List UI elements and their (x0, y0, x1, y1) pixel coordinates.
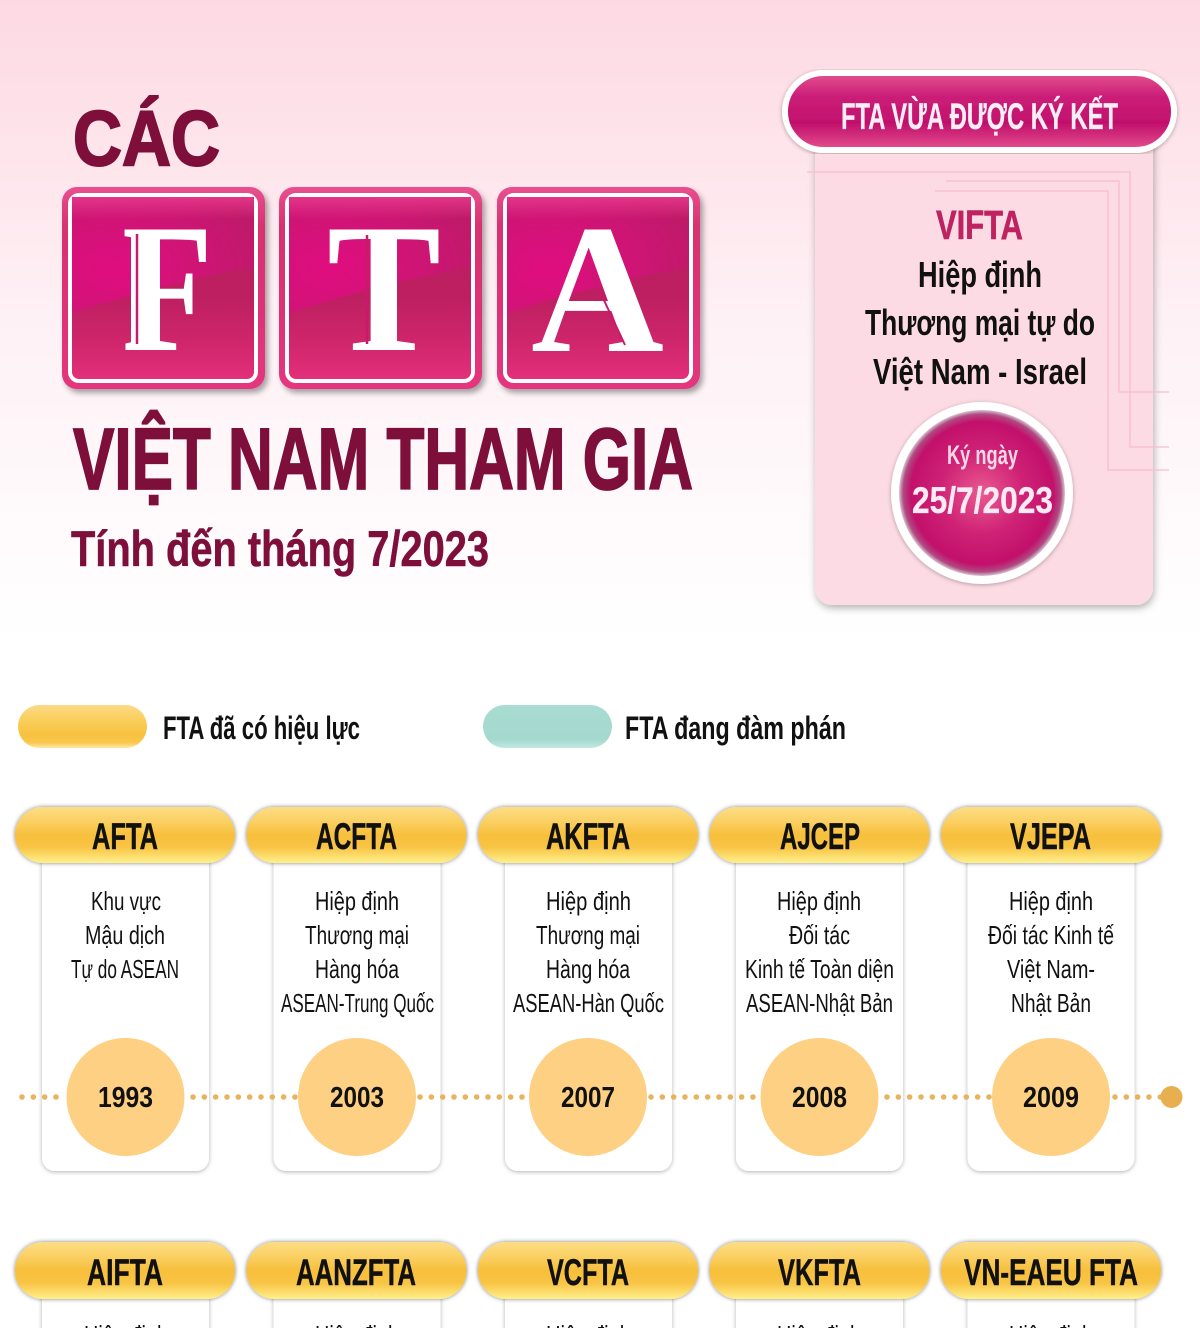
signing date badge: 25/7/2023 (912, 480, 1053, 521)
legend: negotiating (483, 705, 846, 748)
text: VIFTA description: Hiệp định (918, 254, 1042, 295)
text: VIFTA description (865, 202, 1095, 392)
tile: letter F (62, 186, 265, 390)
year: 2007 (529, 1038, 647, 1156)
tile: letter T: T (327, 186, 441, 390)
card: AJCEP: ASEAN-Nhật Bản (746, 988, 893, 1018)
year: 2009 (992, 1038, 1110, 1156)
legend (18, 705, 846, 748)
year: 2008: 2008 (792, 1082, 847, 1114)
card: AKFTA: Hàng hóa (546, 954, 630, 984)
pill heading (785, 73, 1174, 150)
text: VIFTA description: Việt Nam - Israel (873, 351, 1087, 392)
card: VJEPA: Việt Nam- (1007, 954, 1095, 984)
card: AKFTA: Thương mại (536, 920, 640, 950)
card: VJEPA: Hiệp định (1009, 886, 1093, 916)
legend: negotiating: FTA đang đàm phán (625, 710, 846, 746)
heading: CÁC: CÁC (73, 94, 220, 182)
card: AKFTA: ASEAN-Hàn Quốc (513, 988, 664, 1018)
card: VKFTA (710, 1242, 930, 1328)
card: AJCEP: Đối tác (789, 920, 850, 950)
signing date badge: Ký ngày (947, 440, 1018, 470)
card: AIFTA: AIFTA (87, 1252, 163, 1293)
year: 1993: 1993 (98, 1082, 153, 1114)
background gradient (0, 0, 1200, 640)
card: VCFTA (478, 1242, 698, 1328)
card: VJEPA: Đối tác Kinh tế (988, 920, 1114, 950)
card: ACFTA: ASEAN-Trung Quốc (281, 988, 434, 1018)
tile: letter T (279, 186, 482, 390)
card: AANZFTA: AANZFTA (296, 1252, 416, 1293)
legend: in force: FTA đã có hiệu lực (163, 710, 360, 746)
card: AJCEP: Hiệp định (777, 886, 861, 916)
card: VJEPA: VJEPA (1010, 816, 1091, 857)
timeline end dot (1160, 1086, 1182, 1108)
card: VJEPA: Nhật Bản (1011, 988, 1091, 1018)
card: AFTA: Tự do ASEAN (71, 954, 179, 984)
card: AFTA: Khu vực (91, 886, 161, 916)
card: ACFTA (246, 807, 466, 1171)
panel body (815, 120, 1153, 605)
dotted timeline (22, 1094, 1161, 1100)
card: ACFTA: ACFTA (316, 816, 397, 857)
card: AFTA: Mậu dịch (85, 920, 165, 950)
card: VKFTA: VKFTA (778, 1252, 861, 1293)
tile: letter A: A (531, 187, 664, 391)
text: VIFTA description: Thương mại tự do (865, 302, 1095, 343)
card: AKFTA: AKFTA (546, 816, 630, 857)
tile: letter F: F (122, 186, 213, 390)
year: 2007: 2007 (561, 1082, 615, 1114)
timeline row 2 (15, 1242, 1161, 1328)
text: VIFTA description: VIFTA (936, 202, 1023, 248)
card: ACFTA: Hàng hóa (315, 954, 399, 984)
panel: newly signed FTA (785, 73, 1174, 605)
year: 2003 (298, 1038, 416, 1156)
heading: VIỆT NAM THAM GIA: VIỆT NAM THAM GIA (73, 411, 693, 508)
timeline row 1 (15, 807, 1182, 1171)
card: VCFTA: VCFTA (547, 1252, 629, 1293)
card: AANZFTA (246, 1242, 466, 1328)
year: 2009: 2009 (1023, 1082, 1079, 1114)
card: AJCEP: Kinh tế Toàn diện (745, 954, 894, 984)
signing date badge (891, 402, 1073, 584)
card: VJEPA (941, 807, 1161, 1171)
card: ACFTA: Thương mại (305, 920, 409, 950)
card: AJCEP: AJCEP (780, 816, 860, 857)
card: VN-EAEU FTA (941, 1242, 1161, 1328)
year: 2003: 2003 (330, 1082, 384, 1114)
card: AFTA: AFTA (92, 816, 158, 857)
tile: letter A (497, 187, 700, 391)
card: AFTA (15, 807, 235, 1171)
legend: in force (18, 705, 360, 748)
decorative lines (807, 172, 1169, 470)
year: 2008 (760, 1038, 878, 1156)
card: AIFTA (15, 1242, 235, 1328)
card: AJCEP (710, 807, 930, 1171)
subheading: date: Tính đến tháng 7/2023 (71, 521, 489, 577)
year: 1993 (66, 1038, 184, 1156)
card: ACFTA: Hiệp định (315, 886, 399, 916)
title block (62, 94, 700, 577)
card: AKFTA (478, 807, 698, 1171)
card: AKFTA: Hiệp định (546, 886, 631, 916)
